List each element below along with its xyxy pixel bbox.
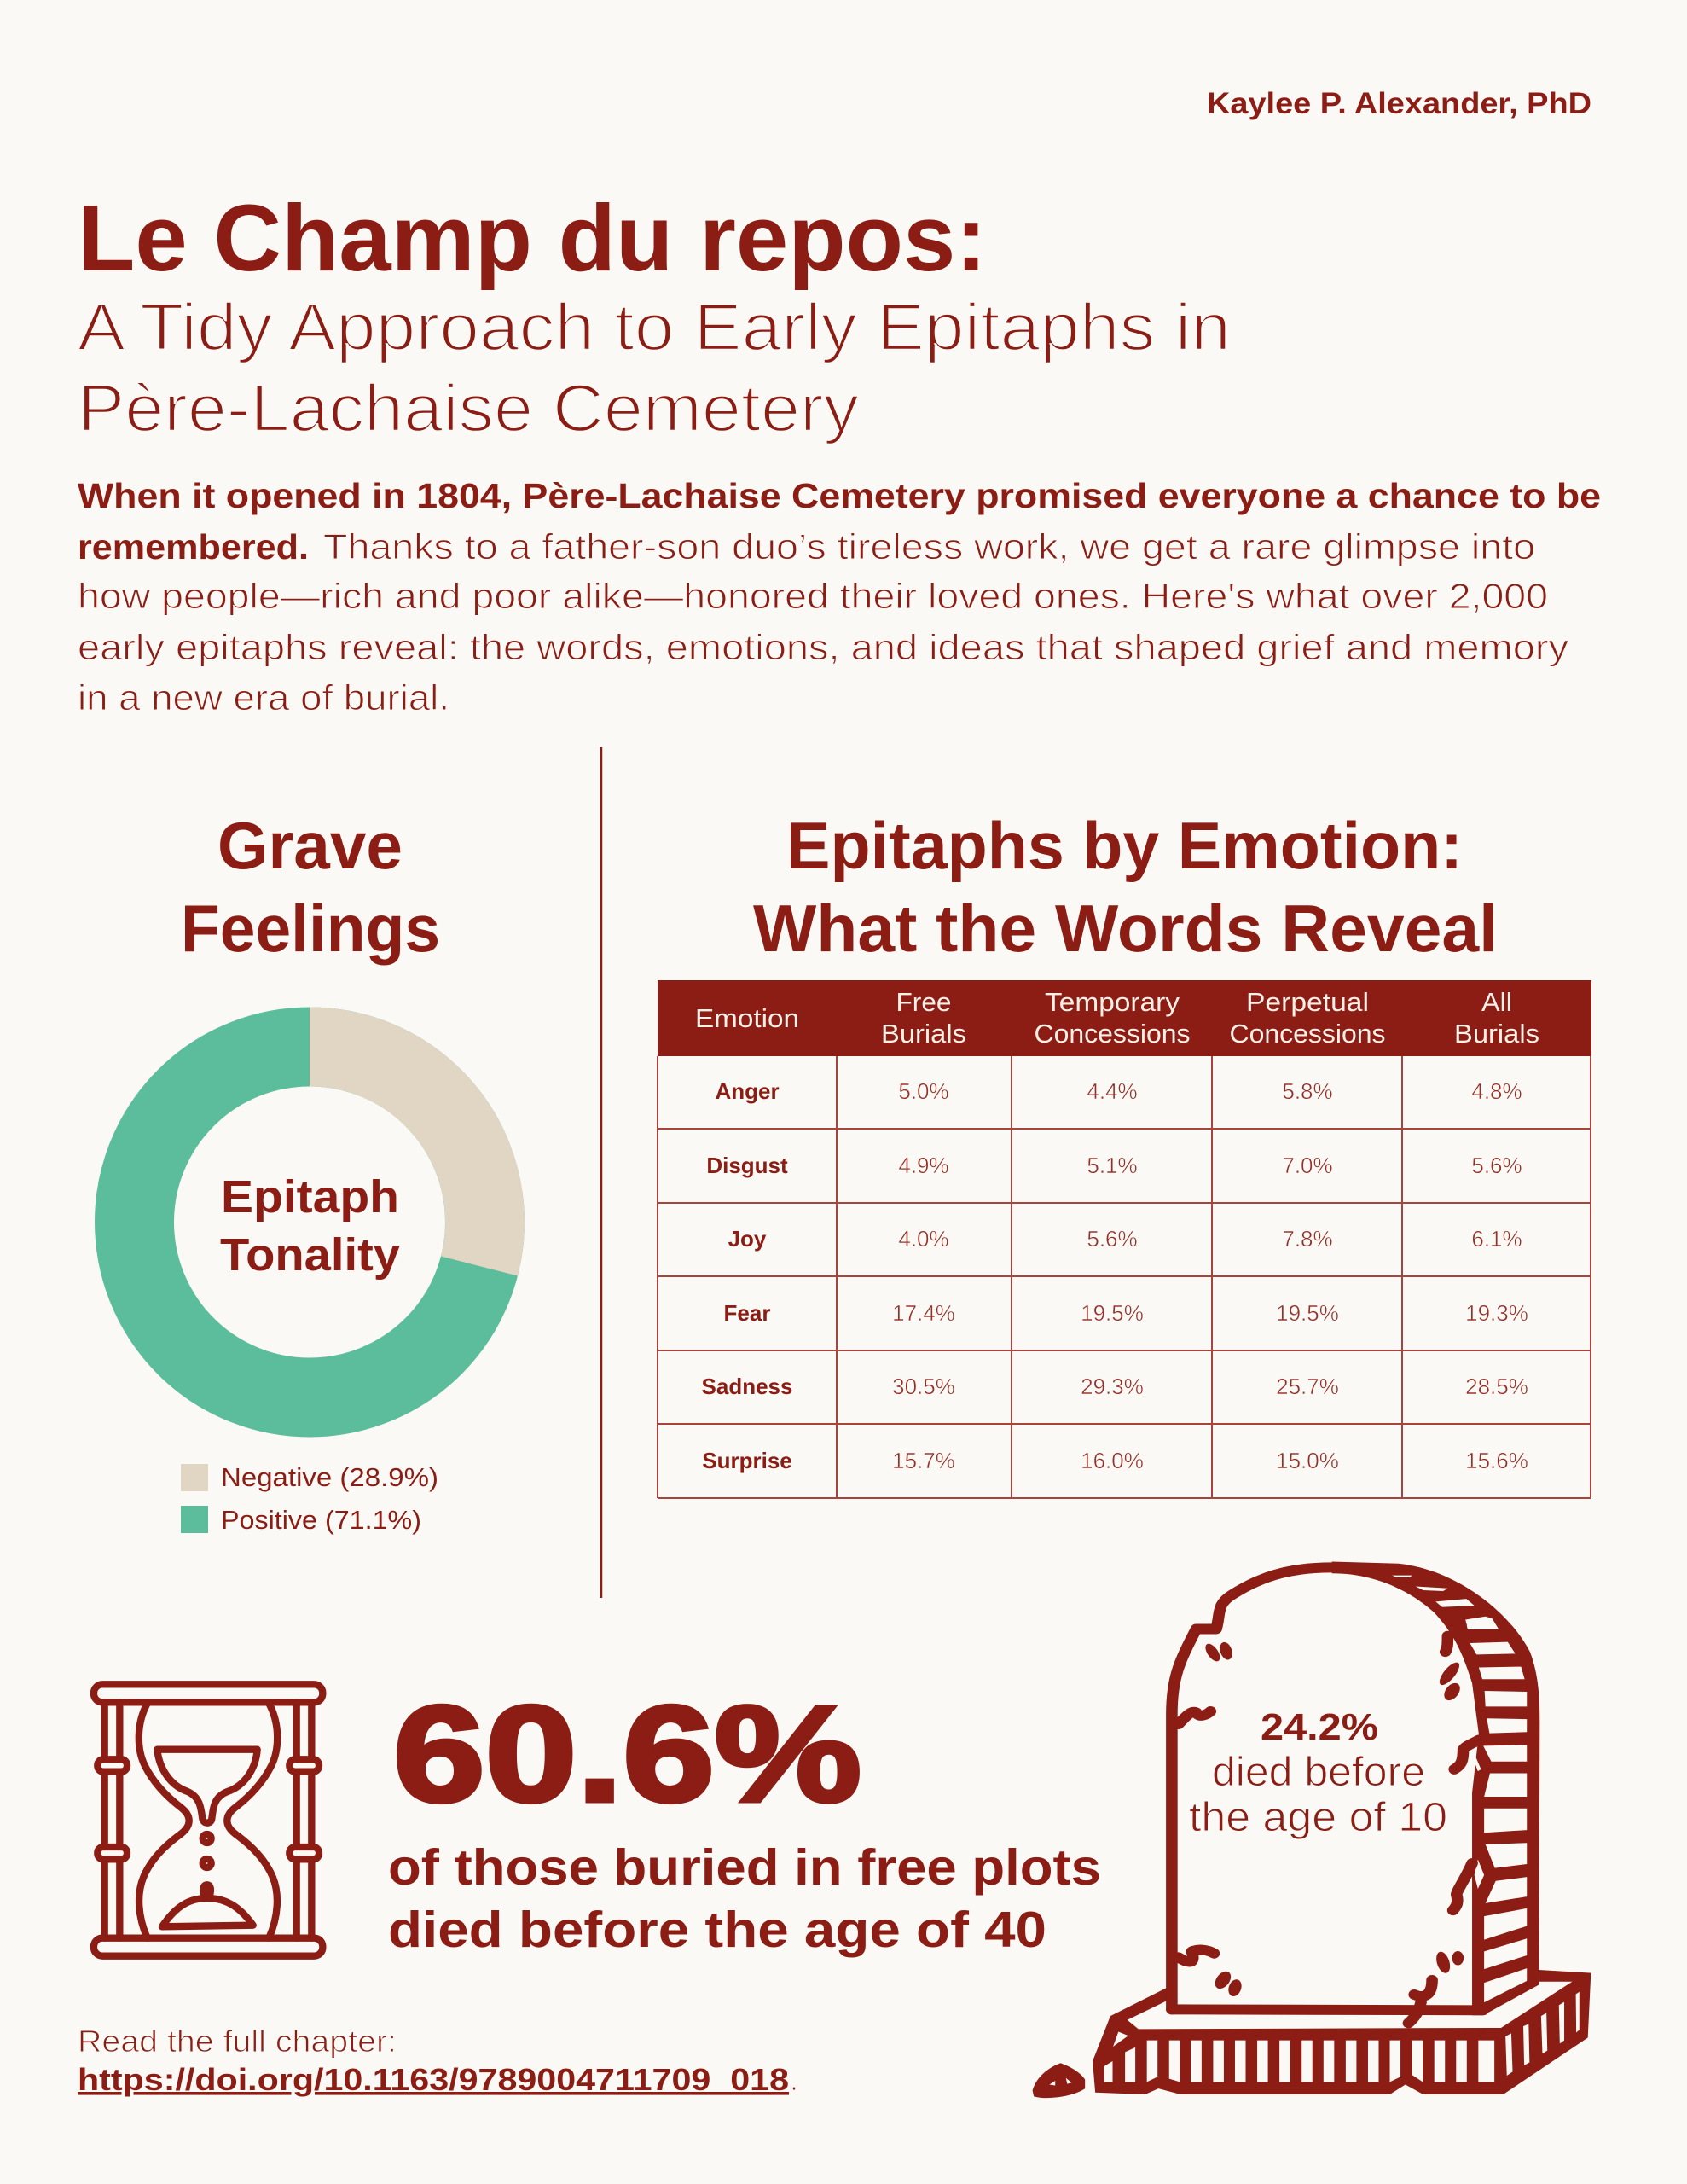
heading: Grave Feelings: Feelings	[181, 891, 440, 966]
table: epitaphs by emotion: Perpetual	[1246, 987, 1369, 1017]
legend: Negative (28.9%)	[221, 1462, 438, 1492]
table: epitaphs by emotion: 4.8%	[1471, 1078, 1522, 1104]
table: epitaphs by emotion: 19.5%	[1081, 1300, 1144, 1326]
table: epitaphs by emotion: Free	[896, 987, 952, 1017]
table: epitaphs by emotion: 5.6%	[1471, 1153, 1522, 1178]
table: epitaphs by emotion	[658, 980, 1591, 1498]
title	[78, 186, 1231, 445]
table: epitaphs by emotion: Surprise	[702, 1448, 792, 1473]
tombstone text	[1189, 1706, 1447, 1840]
table: epitaphs by emotion: 4.0%	[898, 1226, 949, 1252]
legend	[181, 1462, 438, 1535]
title: Père-Lachaise Cemetery	[78, 370, 859, 445]
table: epitaphs by emotion: Fear	[724, 1300, 770, 1326]
title: Le Champ du repos:	[78, 186, 987, 291]
table: epitaphs by emotion: 5.0%	[898, 1078, 949, 1104]
icon: hourglass	[94, 1684, 322, 1956]
table: epitaphs by emotion: 25.7%	[1276, 1374, 1339, 1399]
table: epitaphs by emotion: 4.9%	[898, 1153, 949, 1178]
table: epitaphs by emotion: 5.8%	[1282, 1078, 1333, 1104]
intro paragraph: When it opened in 1804, Père-Lachaise Cemetery promised everyone a chance to be	[78, 476, 1601, 515]
stat: 60.6%: 60.6%	[393, 1677, 861, 1830]
table: epitaphs by emotion: 16.0%	[1081, 1448, 1144, 1473]
tombstone text: 24.2%	[1261, 1706, 1378, 1748]
table: epitaphs by emotion: Joy	[728, 1226, 767, 1252]
donut chart: epitaph tonality: Tonality	[220, 1229, 400, 1281]
table: epitaphs by emotion: 7.0%	[1282, 1153, 1333, 1178]
table: epitaphs by emotion: 15.6%	[1465, 1448, 1528, 1473]
table: epitaphs by emotion: 28.5%	[1465, 1374, 1528, 1399]
heading: Epitaphs by Emotion: Epitaphs by Emotion:	[786, 808, 1463, 883]
stat: 60.6%	[388, 1677, 1101, 1958]
table: epitaphs by emotion: Concessions	[1034, 1019, 1191, 1048]
table: epitaphs by emotion: 5.1%	[1087, 1153, 1138, 1178]
donut chart: epitaph tonality	[135, 1007, 525, 1397]
stat: 60.6%: died before the age of 40	[388, 1902, 1046, 1958]
table: epitaphs by emotion: 19.3%	[1465, 1300, 1528, 1326]
intro paragraph	[78, 476, 1601, 717]
footer link: .	[790, 2062, 798, 2097]
intro paragraph: Thanks to a father-son duo’s tireless work, we get a rare glimpse into	[323, 526, 1535, 566]
heading: Grave Feelings: Grave	[217, 808, 403, 883]
table: epitaphs by emotion: Anger	[715, 1078, 780, 1104]
heading: Grave Feelings	[181, 808, 440, 966]
heading: Epitaphs by Emotion: What the Words Reveal	[753, 891, 1498, 966]
donut chart: epitaph tonality: Epitaph	[221, 1171, 399, 1223]
table: epitaphs by emotion: 6.1%	[1471, 1226, 1522, 1252]
title: A Tidy Approach to Early Epitaphs in	[78, 289, 1231, 364]
tombstone text: died before	[1212, 1750, 1425, 1795]
icon: tombstone	[1033, 1562, 1591, 2098]
footer link: https://doi.org/10.1163/9789004711709_018	[78, 2062, 789, 2097]
intro paragraph: early epitaphs reveal: the words, emotions, and ideas that shaped grief and memory	[78, 627, 1568, 667]
table: epitaphs by emotion: 7.8%	[1282, 1226, 1333, 1252]
tombstone text: the age of 10	[1189, 1795, 1447, 1840]
footer link	[78, 2024, 798, 2097]
table: epitaphs by emotion: Emotion	[695, 1003, 799, 1033]
table: epitaphs by emotion: 30.5%	[892, 1374, 955, 1399]
intro paragraph: how people—rich and poor alike—honored their loved ones. Here's what over 2,000	[78, 576, 1548, 616]
table: epitaphs by emotion: Temporary	[1045, 987, 1180, 1017]
table: epitaphs by emotion: Burials	[881, 1019, 966, 1048]
table: epitaphs by emotion: All	[1481, 987, 1512, 1017]
table: epitaphs by emotion: Disgust	[706, 1153, 788, 1178]
table: epitaphs by emotion: 17.4%	[892, 1300, 955, 1326]
footer link: Read the full chapter:	[78, 2024, 397, 2059]
intro paragraph: in a new era of burial.	[78, 677, 449, 717]
table: epitaphs by emotion: Concessions	[1230, 1019, 1385, 1048]
table: epitaphs by emotion: 15.0%	[1276, 1448, 1339, 1473]
author: Kaylee P. Alexander, PhD	[1207, 87, 1591, 120]
table: epitaphs by emotion: 5.6%	[1087, 1226, 1138, 1252]
table: epitaphs by emotion: 29.3%	[1081, 1374, 1144, 1399]
stat: 60.6%: of those buried in free plots	[388, 1839, 1101, 1896]
table: epitaphs by emotion: 15.7%	[892, 1448, 955, 1473]
intro paragraph: remembered.	[78, 527, 309, 566]
table: epitaphs by emotion: 4.4%	[1087, 1078, 1138, 1104]
table: epitaphs by emotion: Burials	[1454, 1019, 1539, 1048]
legend: Positive (71.1%)	[221, 1505, 421, 1535]
heading: Epitaphs by Emotion	[753, 808, 1498, 966]
table: epitaphs by emotion: Sadness	[702, 1374, 792, 1399]
table: epitaphs by emotion: 19.5%	[1276, 1300, 1339, 1326]
